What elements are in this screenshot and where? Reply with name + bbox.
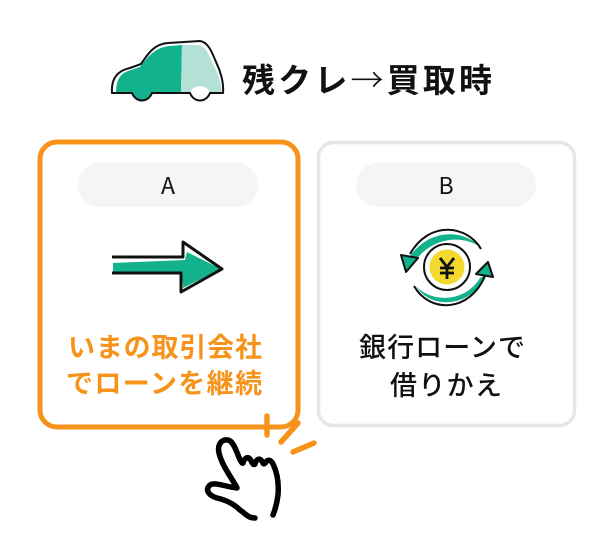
pill label B xyxy=(356,163,536,207)
panel: option B xyxy=(318,142,574,426)
option A text: でローンを継続 xyxy=(66,362,262,401)
option A text: いまの取引会社 xyxy=(68,326,262,365)
panel: option A xyxy=(40,142,298,427)
icon: pointing hand xyxy=(208,440,278,518)
coin xyxy=(424,244,470,290)
arrow: lower xyxy=(414,262,493,305)
option B text: 借りかえ xyxy=(390,364,502,403)
pill label A xyxy=(78,163,258,207)
arrow: upper xyxy=(401,230,481,272)
pill label A: A xyxy=(161,167,175,201)
pill label B: B xyxy=(438,167,454,201)
icon: arrow xyxy=(112,242,222,292)
option B text: 銀行ローンで xyxy=(359,326,525,365)
icon: car xyxy=(112,41,223,100)
icon: tap sparks xyxy=(267,416,314,452)
option A text xyxy=(66,326,262,401)
icon: yen coin with arrows xyxy=(401,230,493,305)
title: 残クレ→買取時 xyxy=(242,54,492,102)
option B text xyxy=(359,326,525,403)
